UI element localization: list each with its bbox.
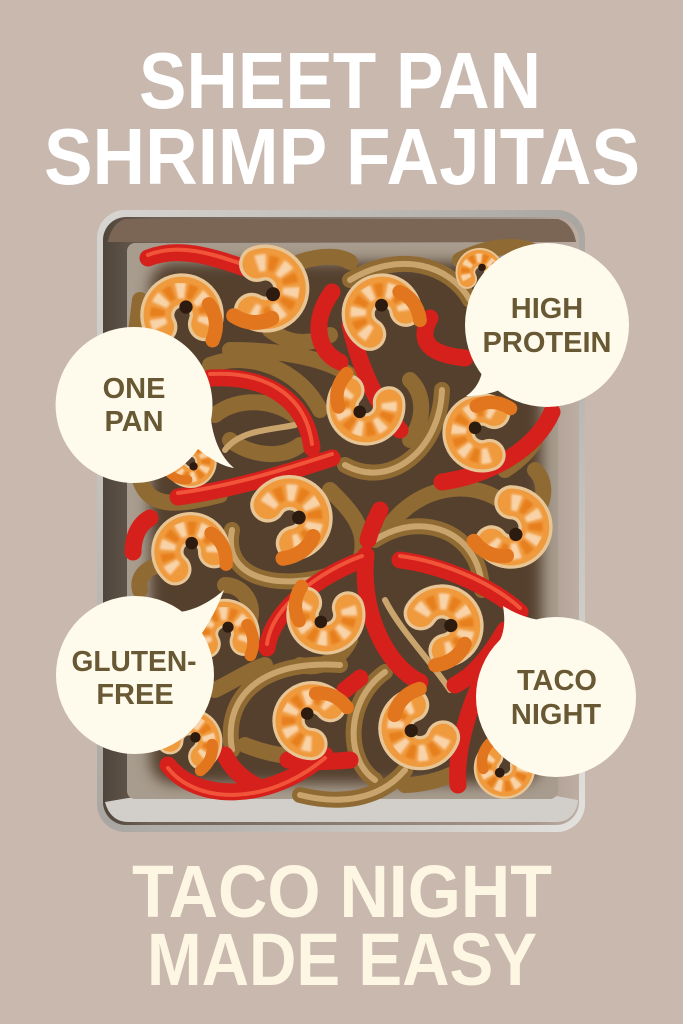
badge: taco night: TACO [517, 665, 597, 697]
pan rim [97, 210, 585, 832]
badge: one pan: PAN [104, 406, 164, 438]
tagline: TACO NIGHT [132, 850, 552, 933]
tagline: MADE EASY [147, 918, 537, 1001]
badge: gluten-free: GLUTEN- [72, 646, 196, 678]
tagline [132, 850, 552, 1001]
badge: gluten-free: FREE [96, 679, 174, 711]
badge: gluten-free [56, 590, 224, 754]
badge: taco night: NIGHT [511, 699, 601, 731]
shrimp [157, 258, 545, 791]
badge: one pan [56, 327, 234, 483]
title [44, 36, 640, 201]
onion strips [133, 247, 552, 800]
pan back lip [108, 219, 576, 242]
badge: high protein [465, 243, 629, 407]
badge: taco night [476, 606, 636, 777]
title: SHRIMP FAJITAS [44, 112, 640, 201]
sheet pan with fajitas [97, 210, 585, 832]
pan floor [127, 243, 558, 799]
pan wall [103, 217, 579, 825]
pan front lip [105, 796, 578, 822]
title: SHEET PAN [139, 36, 541, 125]
badge: one pan: ONE [103, 373, 165, 405]
badge: high protein: PROTEIN [483, 327, 611, 359]
red pepper strips [133, 253, 552, 792]
badge: high protein: HIGH [511, 293, 583, 325]
